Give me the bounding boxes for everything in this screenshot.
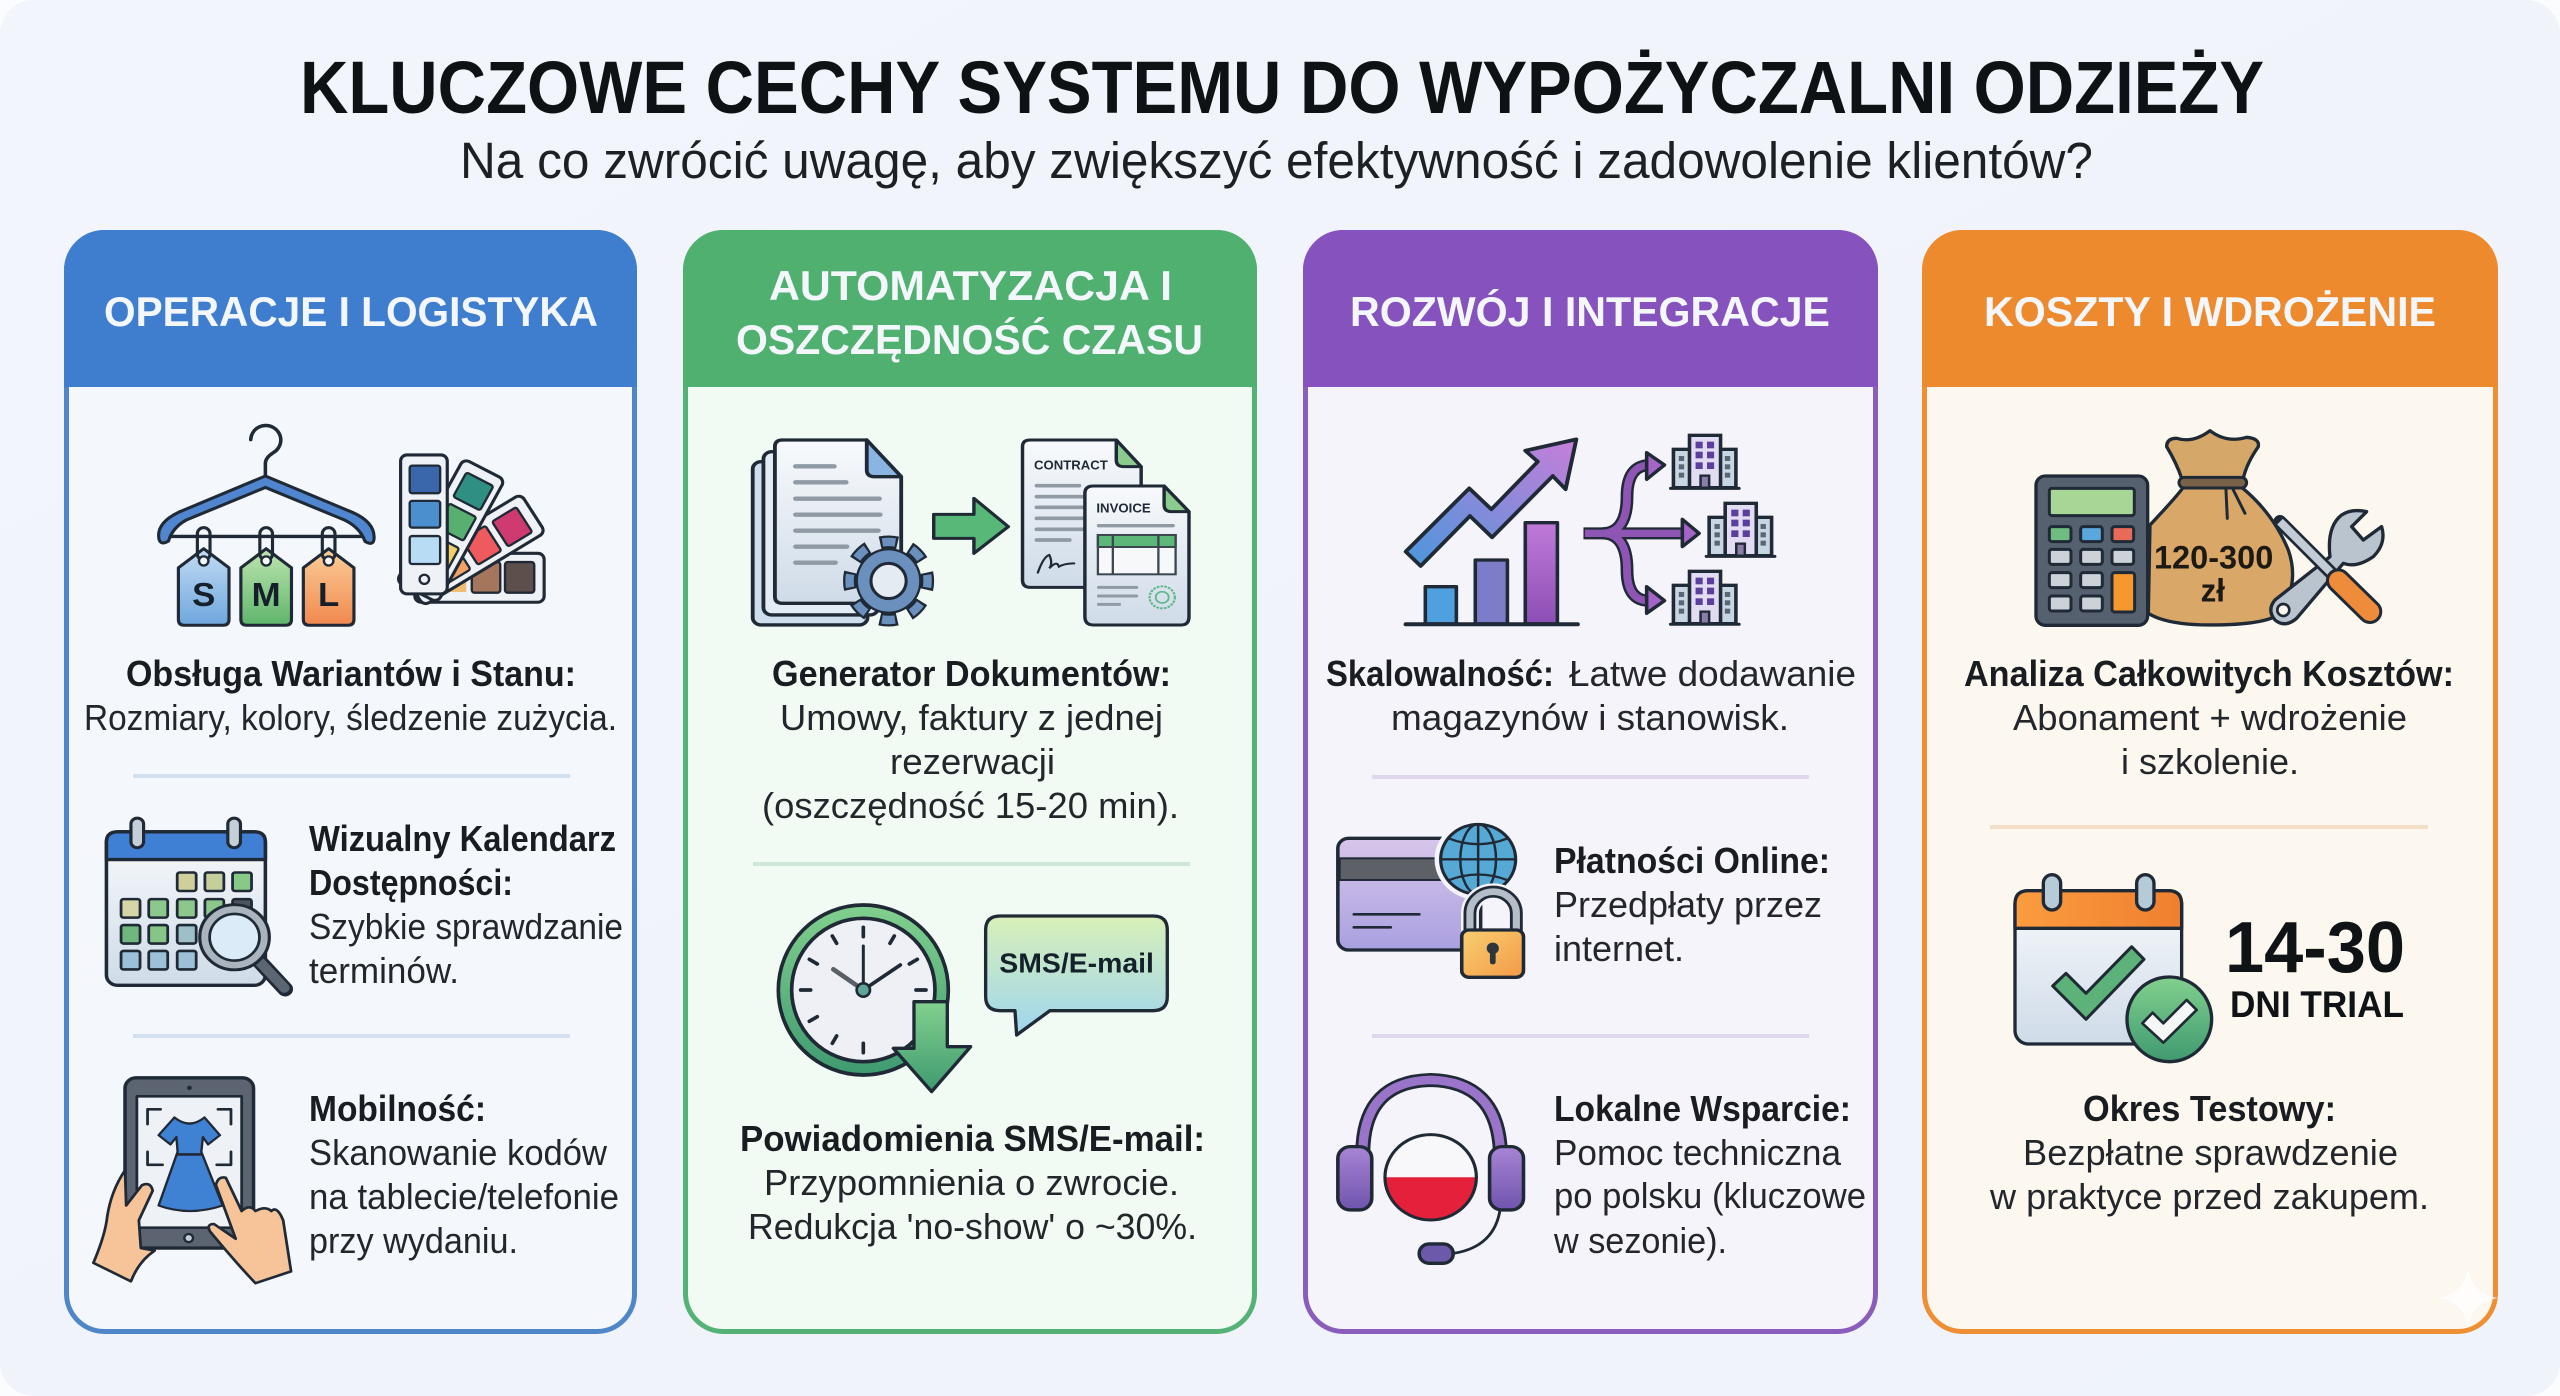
text: skalowalność: Skalowalność: (1326, 653, 1554, 694)
icon: calculator (2036, 476, 2148, 625)
icon: colour palette fan (396, 455, 545, 606)
panel: automatyzacja i oszczędność czasu (683, 230, 1257, 1332)
text: skalowalność: magazynów i stanowisk. (1391, 697, 1789, 738)
callout: 14-30 dni trial: 14-30 (2225, 908, 2405, 988)
panel header: automatyzacja (683, 230, 1257, 387)
text: obsługa wariantów: Obsługa Wariantów i Stanu: (126, 653, 576, 694)
callout: 14-30 dni trial: DNI TRIAL (2230, 984, 2404, 1025)
icon: money bag with 120-300 zł: 120-300 (2154, 539, 2273, 575)
text: wizualny kalendarz: Wizualny Kalendarz (309, 818, 616, 859)
icon: growth chart (1406, 439, 1578, 624)
text: okres testowy: Bezpłatne sprawdzenie (2023, 1132, 2398, 1173)
arrow: green right (934, 498, 1008, 553)
text: generator dokumentów: (oszczędność 15-20 min). (762, 785, 1179, 826)
text: lokalne wsparcie: Pomoc techniczna (1554, 1132, 1842, 1173)
text: wizualny kalendarz: Szybkie sprawdzanie (309, 906, 623, 947)
text: obsługa wariantów (84, 653, 617, 738)
icon: wrench and screwdriver (2271, 511, 2383, 624)
panel header: automatyzacja: OSZCZĘDNOŚĆ CZASU (736, 315, 1203, 363)
subtitle: Na co zwrócić uwagę, aby zwiększyć efektywność i zadowolenie klientów? (460, 132, 2093, 189)
text: skalowalność: Łatwe dodawanie (1569, 653, 1856, 694)
panel header: rozwój: ROZWÓJ I INTEGRACJE (1350, 287, 1830, 335)
text: powiadomienia: Redukcja 'no-show' o ~30%. (748, 1206, 1197, 1247)
icon: sms/e-mail speech bubble (986, 916, 1167, 1035)
text: lokalne wsparcie: w sezonie). (1553, 1220, 1727, 1261)
panel: rozwój i integracje (1303, 230, 1878, 1332)
text: lokalne wsparcie (1553, 1088, 1866, 1261)
text: wizualny kalendarz: Dostępności: (309, 862, 513, 903)
text: mobilność (309, 1088, 619, 1261)
text: wizualny kalendarz: terminów. (309, 950, 459, 991)
title: KLUCZOWE CECHY SYSTEMU DO WYPOŻYCZALNI ODZIEŻY (300, 46, 2264, 129)
icon: money bag with 120-300 zł (2148, 431, 2293, 625)
panel header: automatyzacja: AUTOMATYZACJA I (769, 262, 1172, 309)
text: generator dokumentów (762, 653, 1179, 826)
icon: money bag with 120-300 zł: zł (2201, 573, 2225, 609)
text: powiadomienia (740, 1118, 1205, 1247)
text: generator dokumentów: Umowy, faktury z jednej (780, 697, 1163, 738)
text: skalowalność (1326, 653, 1856, 738)
text: mobilność: przy wydaniu. (309, 1220, 518, 1261)
icon: tablet scanning a dress (93, 1078, 291, 1283)
icon: clock with down arrow (778, 905, 971, 1092)
text: płatności online: Przedpłaty przez (1554, 884, 1822, 925)
icon: hanger with size tags: L (318, 577, 339, 614)
icon: hanger with size tags (159, 425, 374, 625)
icon: hanger with size tags: M (252, 577, 281, 614)
icon: availability calendar with magnifier (106, 818, 285, 989)
text: generator dokumentów: Generator Dokumentów: (772, 653, 1171, 694)
text: okres testowy (1989, 1088, 2429, 1217)
text: powiadomienia: Powiadomienia SMS/E-mail: (740, 1118, 1205, 1159)
text: mobilność: Mobilność: (309, 1088, 486, 1129)
icon: contract and invoice (1023, 440, 1189, 625)
callout: 14-30 dni trial (2225, 908, 2405, 1025)
text: analiza kosztów: Analiza Całkowitych Kosztów: (1964, 653, 2454, 694)
panel: koszty i wdrożenie (1922, 230, 2498, 1332)
text: lokalne wsparcie: po polsku (kluczowe (1554, 1175, 1866, 1216)
icon: trial calendar with check (2015, 875, 2212, 1062)
text: płatności online (1554, 840, 1830, 969)
panel header: rozwój (1303, 230, 1878, 387)
text: mobilność: na tablecie/telefonie (309, 1176, 619, 1217)
panel header: koszty: KOSZTY I WDROŻENIE (1984, 288, 2436, 335)
icon: credit card, globe and padlock (1338, 819, 1523, 977)
text: analiza kosztów: Abonament + wdrożenie (2013, 697, 2407, 738)
text: generator dokumentów: rezerwacji (890, 741, 1055, 782)
text: analiza kosztów: i szkolenie. (2121, 741, 2299, 782)
text: analiza kosztów (1964, 653, 2454, 782)
icon: contract and invoice: INVOICE (1096, 502, 1151, 516)
icon: hanger with size tags: S (192, 577, 215, 614)
panel: operacje i logistyka (64, 230, 637, 1332)
icon: branching arrows to warehouses (1583, 435, 1775, 624)
text: mobilność: Skanowanie kodów (309, 1132, 608, 1173)
text: płatności online: Płatności Online: (1554, 840, 1830, 881)
text: wizualny kalendarz (309, 818, 623, 991)
text: okres testowy: w praktyce przed zakupem. (1989, 1176, 2429, 1217)
icon: document generator with gear (753, 440, 928, 625)
icon: contract and invoice: CONTRACT (1034, 458, 1108, 473)
text: obsługa wariantów: Rozmiary, kolory, śledzenie zużycia. (84, 697, 617, 738)
text: okres testowy: Okres Testowy: (2083, 1088, 2336, 1129)
panel header: operacje i logistyka: OPERACJE I LOGISTYKA (104, 288, 598, 335)
icon: sms/e-mail speech bubble: SMS/E-mail (999, 948, 1154, 979)
icon: headset with polish flag (1338, 1080, 1523, 1263)
text: płatności online: internet. (1554, 928, 1684, 969)
panel header: operacje i logistyka (64, 230, 637, 387)
panel header: koszty (1922, 230, 2498, 387)
text: lokalne wsparcie: Lokalne Wsparcie: (1554, 1088, 1851, 1129)
text: powiadomienia: Przypomnienia o zwrocie. (764, 1162, 1179, 1203)
